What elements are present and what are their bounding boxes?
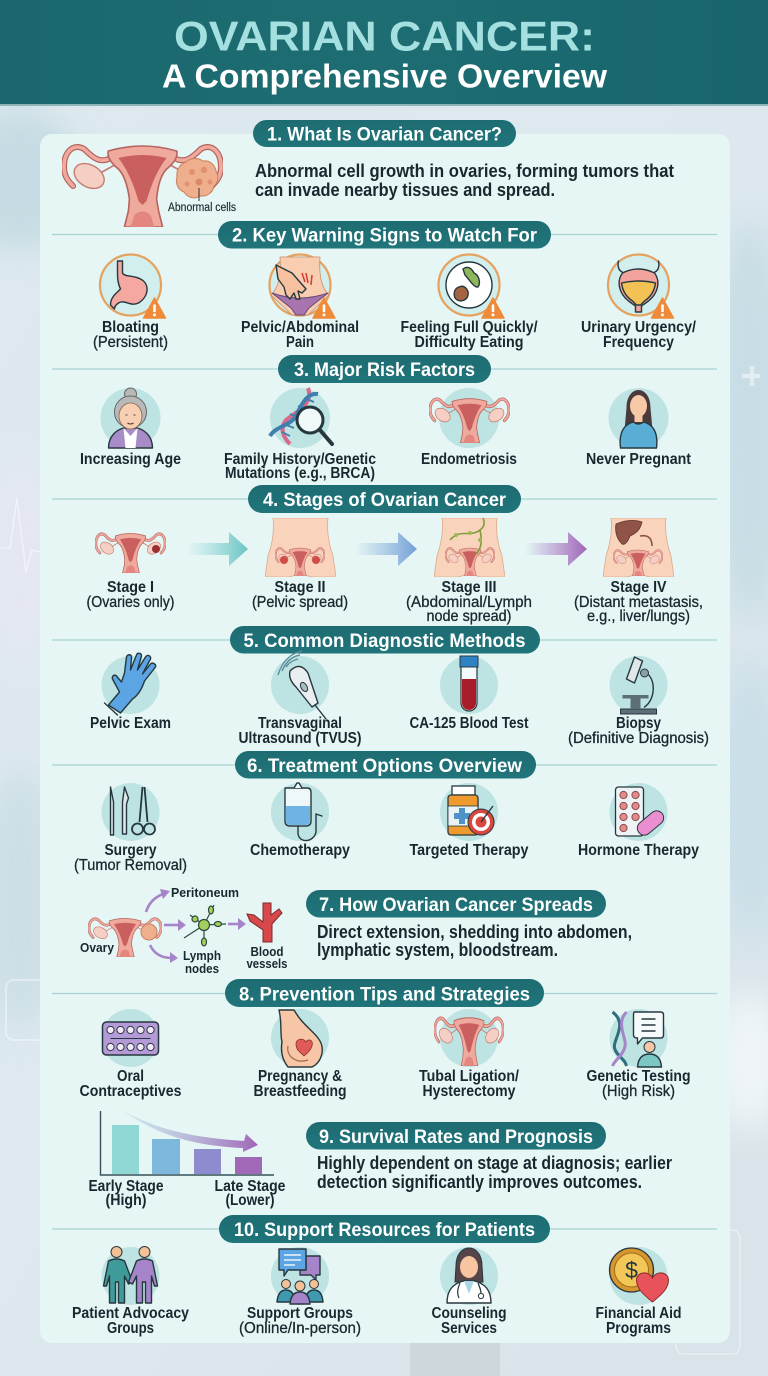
- item: CA-125: [410, 656, 528, 732]
- label: Surgery: [104, 842, 157, 859]
- label: blood vessels: Blood: [250, 944, 284, 959]
- description 7: Direct extension, shedding into abdomen,: [317, 922, 632, 942]
- item: pregnancy: [254, 1009, 346, 1100]
- description 1: [255, 161, 674, 200]
- icon: ultrasound probe: [271, 651, 329, 719]
- label: Patient Advocacy: [72, 1305, 189, 1322]
- declining arrow: [122, 1110, 258, 1152]
- label: (Persistent): [93, 334, 168, 351]
- label: [241, 319, 359, 351]
- heading pill 9: 9. Survival Rates and Prognosis: [319, 1126, 593, 1148]
- item: stage I: [86, 533, 174, 611]
- subtitle: A Comprehensive Overview: [162, 58, 607, 94]
- item: targeted therapy: [410, 783, 529, 859]
- label: Groups: [107, 1320, 154, 1337]
- section 2: warning signs: [93, 221, 697, 351]
- lymph nodes icon: [184, 905, 226, 946]
- label: [238, 715, 362, 747]
- item: increasing age: [80, 388, 181, 468]
- label: [568, 715, 709, 747]
- section 1: what is ovarian cancer: [64, 120, 674, 227]
- label: Family History/Genetic: [224, 451, 376, 468]
- label: Oral: [117, 1068, 144, 1085]
- item: never pregnant: [586, 388, 691, 468]
- icon: chat and group: [271, 1247, 329, 1305]
- item: support groups: [239, 1247, 361, 1337]
- item: hormone therapy: [578, 783, 699, 859]
- label: early stage: (High): [106, 1192, 146, 1209]
- label: [586, 1068, 690, 1100]
- icon: uterus with ligated tubes: [435, 1009, 503, 1067]
- label: [239, 1305, 361, 1337]
- item: stage IV: [574, 518, 703, 625]
- label: (Online/In-person): [239, 1320, 361, 1337]
- description 9: [317, 1153, 672, 1192]
- item: urinary urgency: [581, 254, 697, 351]
- uterus and ovary: [89, 918, 161, 957]
- label: [74, 842, 187, 874]
- label: Ultrasound (TVUS): [238, 730, 362, 747]
- label: Endometriosis: [421, 451, 517, 468]
- arrow: stage II to III: [355, 532, 417, 566]
- label: (Distant metastasis,: [574, 594, 703, 611]
- content panel: [40, 134, 730, 1343]
- heading pill 7: 7. How Ovarian Cancer Spreads: [319, 894, 593, 916]
- tumor ovary: [141, 924, 157, 940]
- label: (Ovaries only): [86, 594, 174, 611]
- section 6: treatment: [74, 751, 699, 874]
- label: blood vessels: vessels: [246, 956, 288, 971]
- label: ovary: Ovary: [80, 940, 115, 955]
- label: early stage: Early Stage: [88, 1178, 164, 1195]
- icon: microscope: [610, 656, 668, 714]
- divider lines: [52, 234, 717, 1229]
- section 3: risk factors: [80, 355, 691, 482]
- item: TVUS: [238, 651, 362, 747]
- icon: IV bag: [271, 783, 329, 841]
- icon: two people: [102, 1246, 160, 1305]
- item: bloating: [93, 254, 168, 351]
- icon: doctor: [440, 1247, 498, 1305]
- label: Mutations (e.g., BRCA): [225, 465, 375, 482]
- icon: elderly woman: [100, 388, 160, 448]
- icon: dna and magnifier: [270, 388, 332, 448]
- icon: pregnant belly: [271, 1009, 329, 1067]
- label: Tubal Ligation/: [419, 1068, 520, 1085]
- icon: plate: [438, 254, 504, 318]
- label: Stage I: [107, 579, 154, 596]
- label: Genetic Testing: [586, 1068, 690, 1085]
- heading pill 8: 8. Prevention Tips and Strategies: [239, 984, 530, 1006]
- section 10: support: [72, 1215, 682, 1337]
- arrowheads: [160, 889, 246, 963]
- label: Never Pregnant: [586, 451, 691, 468]
- label: (Pelvic spread): [252, 594, 348, 611]
- illustration: uterus with abnormal cells: [64, 146, 236, 227]
- item: stage III: [406, 518, 532, 625]
- label: [86, 579, 174, 611]
- icon: bottle and target: [440, 783, 498, 841]
- label: Counseling: [432, 1305, 506, 1322]
- label: Increasing Age: [80, 451, 181, 468]
- label: early stage: [88, 1178, 164, 1209]
- label: Support Groups: [247, 1305, 353, 1322]
- section 4: stages: [86, 485, 703, 625]
- label: Hysterectomy: [422, 1083, 516, 1100]
- label: late stage: (Lower): [226, 1192, 274, 1209]
- heading pill 4: 4. Stages of Ovarian Cancer: [263, 489, 506, 511]
- label: Services: [441, 1320, 497, 1337]
- label: [596, 1305, 682, 1337]
- label: CA-125 Blood Test: [410, 715, 528, 732]
- item: chemotherapy: [250, 783, 350, 859]
- label: peritoneum: Peritoneum: [171, 885, 239, 900]
- description 9: detection significantly improves outcomes.: [317, 1172, 642, 1192]
- icon: glove: [102, 653, 160, 715]
- icon: torso stage III: [434, 518, 505, 577]
- icon: bladder: [608, 254, 674, 318]
- description 1: Abnormal cell growth in ovaries, forming tumors that: [255, 161, 674, 181]
- item: oral contraceptives: [80, 1009, 182, 1100]
- label: Pain: [286, 334, 314, 351]
- label: node spread): [426, 608, 512, 625]
- item: family history: [224, 388, 376, 482]
- label: (Tumor Removal): [74, 857, 187, 874]
- icon: uterus: [430, 388, 509, 448]
- label: Pelvic/Abdominal: [241, 319, 359, 336]
- section 8: prevention: [80, 979, 690, 1100]
- description 7: lymphatic system, bloodstream.: [317, 940, 558, 960]
- spread diagram: [80, 885, 288, 976]
- icon: blister pack and capsule: [610, 783, 668, 841]
- label: Contraceptives: [80, 1083, 182, 1100]
- label: Pregnancy &: [258, 1068, 342, 1085]
- label: [406, 579, 532, 625]
- label: blood vessels: [246, 944, 288, 971]
- item: pelvic pain: [241, 254, 359, 351]
- label: Programs: [606, 1320, 671, 1337]
- section 9: survival: [88, 1110, 672, 1209]
- icon: uterus stage I: [96, 533, 165, 573]
- blood vessel icon: [247, 903, 282, 942]
- label: [93, 319, 168, 351]
- label: Targeted Therapy: [410, 842, 529, 859]
- label: lymph nodes: [183, 948, 221, 976]
- heading pill 3: 3. Major Risk Factors: [294, 359, 475, 381]
- description 9: Highly dependent on stage at diagnosis; earlier: [317, 1153, 672, 1173]
- description 7: [317, 922, 632, 960]
- heading pill 10: 10. Support Resources for Patients: [234, 1219, 535, 1241]
- item: financial aid: [596, 1247, 682, 1337]
- icon: torso stage IV: [603, 518, 674, 577]
- label: Feeling Full Quickly/: [400, 319, 538, 336]
- icon: blood tube: [440, 656, 498, 714]
- icon: coin and heart: $: [625, 1257, 638, 1283]
- icon: dna, report and person: [610, 1009, 668, 1067]
- label: [224, 451, 376, 482]
- label: Frequency: [603, 334, 674, 351]
- label: late stage: Late Stage: [214, 1178, 286, 1195]
- item: pelvic exam: [90, 653, 171, 732]
- label: [80, 1068, 182, 1100]
- label: Breastfeeding: [254, 1083, 346, 1100]
- description 1: can invade nearby tissues and spread.: [255, 180, 555, 200]
- label: lymph nodes: Lymph: [183, 948, 221, 963]
- icon: abdomen with hand: [270, 254, 335, 318]
- label: lymph nodes: nodes: [185, 961, 219, 976]
- label: [72, 1305, 189, 1337]
- spread arrows: [146, 894, 240, 958]
- label: Stage II: [274, 579, 326, 596]
- icon: pill pack: [102, 1009, 160, 1067]
- title: OVARIAN CANCER:: [174, 12, 595, 60]
- section 5: diagnostics: [90, 626, 709, 747]
- label: Financial Aid: [596, 1305, 682, 1322]
- arrow: stage III to IV: [525, 532, 587, 566]
- label: Bloating: [102, 319, 159, 336]
- label: [254, 1068, 346, 1100]
- item: advocacy: [72, 1246, 189, 1337]
- heading pill 5: 5. Common Diagnostic Methods: [244, 630, 526, 652]
- item: endometriosis: [421, 388, 517, 468]
- label: late stage: [214, 1178, 286, 1209]
- section 7: how it spreads: [80, 885, 632, 976]
- label: Urinary Urgency/: [581, 319, 697, 336]
- icon: woman: [608, 388, 668, 448]
- label: [581, 319, 697, 351]
- label: Chemotherapy: [250, 842, 350, 859]
- icon: stomach: [100, 254, 166, 318]
- label: Hormone Therapy: [578, 842, 699, 859]
- item: feeling full: [400, 254, 538, 351]
- item: counseling: [432, 1247, 506, 1337]
- label: Pelvic Exam: [90, 715, 171, 732]
- arrow: stage I to II: [187, 532, 248, 566]
- label: abnormal cells: Abnormal cells: [168, 202, 236, 214]
- label: [419, 1068, 520, 1100]
- label: Biopsy: [616, 715, 661, 732]
- icon: torso stage II: [265, 518, 336, 577]
- label: Difficulty Eating: [414, 334, 524, 351]
- bar chart: survival by stage: [88, 1110, 286, 1209]
- item: tubal ligation: [419, 1009, 520, 1100]
- label: e.g., liver/lungs): [587, 608, 690, 625]
- item: genetic testing: [586, 1009, 690, 1100]
- label: (High Risk): [602, 1083, 675, 1100]
- icon: surgical tools: [102, 783, 160, 841]
- header banner: [0, 0, 768, 106]
- label: [252, 579, 348, 611]
- item: biopsy: [568, 656, 709, 747]
- label: Stage IV: [610, 579, 667, 596]
- heading pill 6: 6. Treatment Options Overview: [247, 755, 523, 777]
- label: [574, 579, 703, 625]
- label: [400, 319, 538, 351]
- heading pill 2: 2. Key Warning Signs to Watch For: [232, 224, 537, 246]
- heading pill 1: 1. What Is Ovarian Cancer?: [267, 124, 502, 146]
- label: [432, 1305, 506, 1337]
- label: (Definitive Diagnosis): [568, 730, 709, 747]
- label: Stage III: [442, 579, 496, 596]
- item: stage II: [252, 518, 348, 611]
- label: (Abdominal/Lymph: [406, 594, 532, 611]
- label: Transvaginal: [258, 715, 342, 732]
- item: surgery: [74, 783, 187, 874]
